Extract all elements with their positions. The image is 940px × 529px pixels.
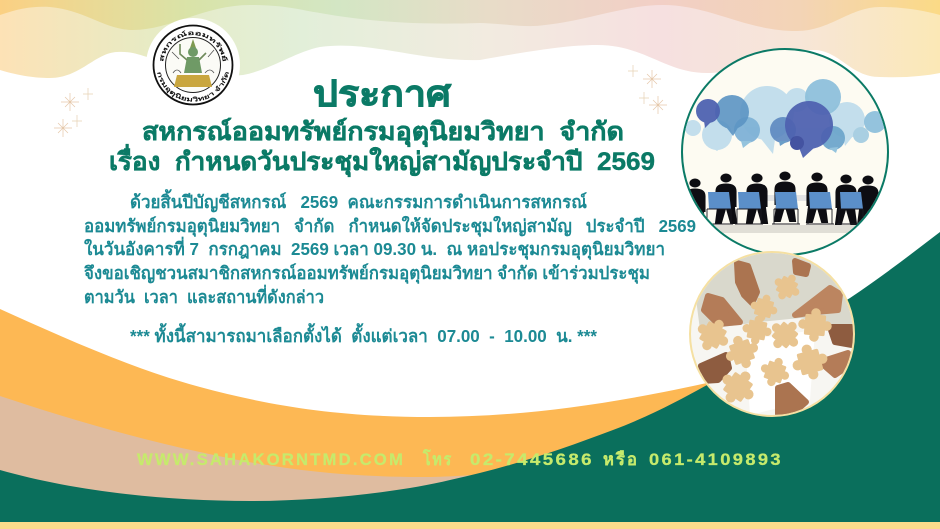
seated silhouettes xyxy=(684,172,879,229)
subtitle line 1: สหกรณ์ออมทรัพย์กรมอุตุนิยมวิทยา จำกัด xyxy=(142,117,624,148)
logo white backing xyxy=(146,18,240,112)
sparkles: left xyxy=(54,88,93,137)
table xyxy=(768,195,806,201)
title: announcement: ประกาศ xyxy=(313,73,452,114)
white table glare xyxy=(745,330,815,415)
seated deity figure xyxy=(172,39,214,87)
photo circle: hands joining puzzle pieces xyxy=(690,252,855,416)
body text: ตามวัน เวลา และสถานที่ดังกล่าว xyxy=(84,284,324,307)
photo circle: meeting silhouettes with speech bubbles xyxy=(682,49,890,255)
footer contact line: WWW.SAHAKORNTMD.COM xyxy=(137,450,405,469)
chairs xyxy=(705,192,865,224)
body text: จึงขอเชิญชวนสมาชิกสหกรณ์ออมทรัพย์กรมอุตุนิยมวิทยา จำกัด เข้าร่วมประชุม xyxy=(83,262,650,284)
floor reflection xyxy=(714,225,856,233)
top wave: white body edge xyxy=(0,45,940,140)
footer contact line: โทร xyxy=(422,449,453,469)
body text xyxy=(83,189,696,307)
footer contact line xyxy=(137,449,783,469)
sparkles: right xyxy=(628,65,667,114)
top wave: lighter band xyxy=(0,5,940,90)
seal ring text: สหกรณ์ออมทรัพย์ xyxy=(160,30,228,62)
body text: ออมทรัพย์กรมอุตุนิยมวิทยา จำกัด กำหนดให้จัดประชุมใหญ่สามัญ ประจำปี 2569 xyxy=(84,215,696,237)
footer contact line: 02-7445686 xyxy=(470,450,594,469)
logo: cooperative seal xyxy=(146,18,240,106)
body text: ในวันอังคารที่ 7 กรกฎาคม 2569 เวลา 09.30 น. ณ หอประชุมกรมอุตุนิยมวิทยา xyxy=(84,236,665,260)
tan wave xyxy=(0,396,520,510)
top wave: darker band xyxy=(0,0,940,80)
puzzle pieces xyxy=(698,274,832,402)
subtitle line 2: เรื่อง กำหนดวันประชุมใหญ่สามัญประจำปี 2569 xyxy=(109,144,655,178)
footer contact line: หรือ xyxy=(603,449,639,469)
seal outer ring xyxy=(154,26,232,104)
voting note: *** ทั้งนี้สามารถมาเลือกตั้งได้ ตั้งแต่เวลา 07.00 - 10.00 น. *** xyxy=(130,323,597,346)
body text: ด้วยสิ้นปีบัญชีสหกรณ์ 2569 คณะกรรมการดำเนินการสหกรณ์ xyxy=(130,189,587,213)
orange wave xyxy=(0,309,720,490)
seal ring text xyxy=(157,30,229,102)
bottom yellow strip xyxy=(0,522,940,529)
speech bubbles xyxy=(685,79,886,158)
green wave xyxy=(0,232,940,522)
hands xyxy=(701,261,852,416)
grey backdrop xyxy=(696,253,852,327)
seal ring text: กรมอุตุนิยมวิทยา จำกัด xyxy=(157,72,229,102)
footer contact line: 061-4109893 xyxy=(649,450,783,469)
